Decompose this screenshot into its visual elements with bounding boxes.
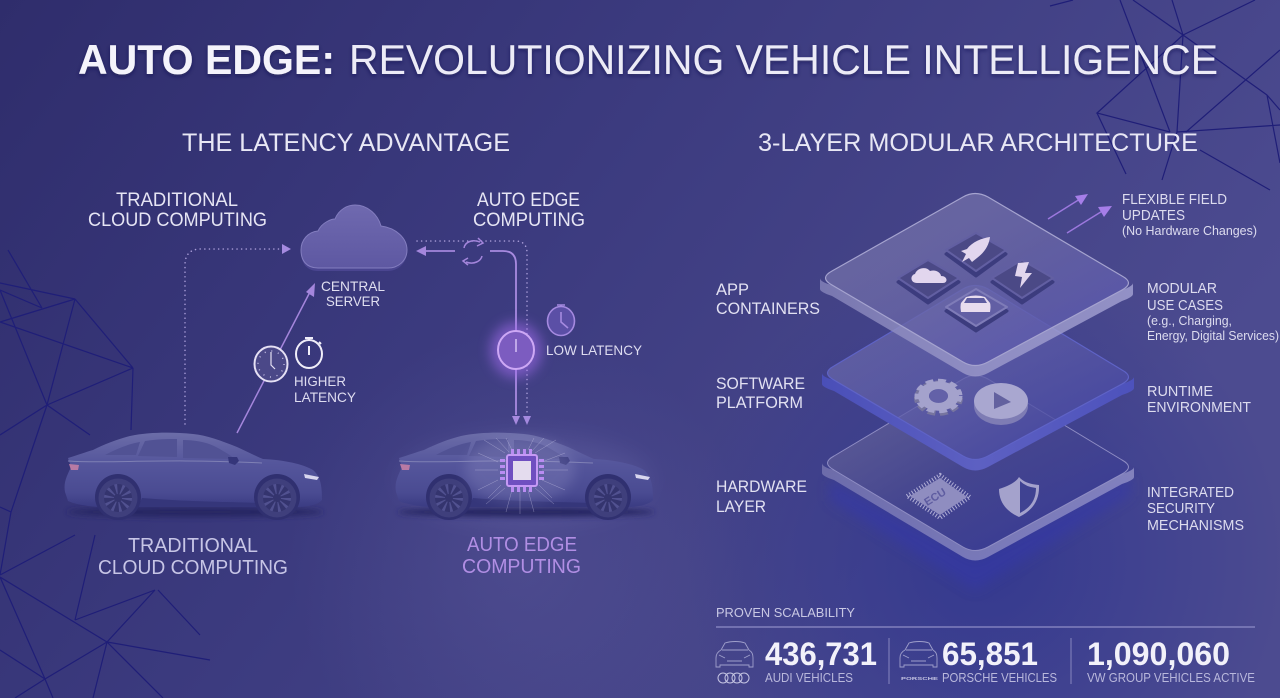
stat: audi xyxy=(716,636,877,685)
icon: low latency clock xyxy=(548,305,574,336)
label: flexible field updates: FLEXIBLE FIELD xyxy=(1122,192,1227,208)
heading: architecture: 3-LAYER MODULAR ARCHITECTURE xyxy=(758,129,1198,157)
label: modular use cases: (e.g., Charging, xyxy=(1147,314,1232,328)
icon: ECU chip: ECU xyxy=(922,486,948,509)
label: central server xyxy=(321,278,385,309)
icon tile: lightning xyxy=(992,260,1053,303)
label: runtime environment: ENVIRONMENT xyxy=(1147,400,1251,416)
label: traditional cloud computing bottom: TRADITIONAL xyxy=(128,535,258,557)
label: modular use cases: USE CASES xyxy=(1147,298,1223,314)
title: AUTO EDGE: xyxy=(78,36,335,83)
arrows: field updates xyxy=(1048,194,1112,233)
stat: porsche xyxy=(900,636,1057,685)
arrow: edge to cloud xyxy=(416,246,455,256)
icon: shield xyxy=(999,477,1039,517)
label: app containers: CONTAINERS xyxy=(716,299,820,318)
car: auto edge xyxy=(396,433,654,525)
label: auto edge computing bottom: COMPUTING xyxy=(462,556,581,578)
label: higher latency: HIGHER xyxy=(294,373,346,389)
icon: ECU chip xyxy=(907,475,970,518)
icon: clock xyxy=(254,346,288,382)
label: flexible field updates: (No Hardware Changes) xyxy=(1122,224,1257,238)
icon: audi rings xyxy=(718,673,749,683)
label: auto edge computing top: AUTO EDGE xyxy=(477,190,580,211)
heading: latency advantage: THE LATENCY ADVANTAGE xyxy=(182,129,510,157)
label: auto edge computing top xyxy=(473,190,585,231)
icon: cloud central server xyxy=(301,205,407,271)
stat: porsche: PORSCHE VEHICLES xyxy=(942,670,1057,685)
icon: audi car xyxy=(716,642,753,667)
label: app containers xyxy=(716,280,820,318)
label: traditional cloud computing top xyxy=(88,190,267,231)
arrow: traditional dotted uplink xyxy=(185,244,291,424)
label: modular use cases: MODULAR xyxy=(1147,281,1217,297)
icon: chip xyxy=(475,438,568,514)
layer: hardware plate xyxy=(822,376,1134,590)
label: modular use cases: Energy, Digital Services) xyxy=(1147,329,1279,343)
label: integrated security mechanisms: SECURITY xyxy=(1147,501,1215,517)
stat: audi: AUDI VEHICLES xyxy=(765,670,853,685)
label: traditional cloud computing top: TRADITIONAL xyxy=(116,190,238,211)
label: hardware layer: HARDWARE xyxy=(716,477,807,496)
label: auto edge computing top: COMPUTING xyxy=(473,210,585,231)
icon tile: cloud xyxy=(898,260,959,303)
arrow: edge solid path xyxy=(490,251,520,425)
label: app containers: APP xyxy=(716,280,749,299)
label: auto edge computing bottom xyxy=(462,534,581,578)
stat: audi: 436,731 xyxy=(765,636,877,672)
label: central server: SERVER xyxy=(326,293,380,309)
label: auto edge computing bottom: AUTO EDGE xyxy=(467,534,577,556)
panel: layered architecture xyxy=(716,192,1279,590)
stats heading: PROVEN SCALABILITY xyxy=(716,605,855,620)
arrow: traditional latency solid xyxy=(237,283,315,433)
icon: play button xyxy=(974,383,1028,425)
stat: vw group: VW GROUP VEHICLES ACTIVE xyxy=(1087,670,1255,685)
stat: porsche: 65,851 xyxy=(942,636,1038,672)
label: hardware layer xyxy=(716,477,807,516)
icon: gear xyxy=(918,381,960,413)
stat: vw group: 1,090,060 xyxy=(1087,636,1230,672)
label: higher latency xyxy=(294,373,357,405)
label: low latency: LOW LATENCY xyxy=(546,342,643,358)
label: software platform: SOFTWARE xyxy=(716,374,805,393)
stat: vw group xyxy=(1087,636,1255,685)
layer: software plate xyxy=(822,286,1134,470)
icon: stopwatch xyxy=(296,338,322,368)
label: software platform xyxy=(716,374,805,412)
label: software platform: PLATFORM xyxy=(716,393,803,412)
label: traditional cloud computing bottom xyxy=(98,535,288,579)
label: runtime environment: RUNTIME xyxy=(1147,384,1213,400)
icon: porsche car xyxy=(900,642,937,667)
label: traditional cloud computing bottom: CLOUD COMPUTING xyxy=(98,557,288,579)
label: modular use cases xyxy=(1147,281,1279,343)
title continuation: REVOLUTIONIZING VEHICLE INTELLIGENCE xyxy=(349,36,1218,83)
car: traditional xyxy=(65,433,323,520)
icon: porsche wordmark: PORSCHE xyxy=(901,676,938,681)
label: higher latency: LATENCY xyxy=(294,389,357,405)
label: integrated security mechanisms: MECHANISMS xyxy=(1147,518,1244,534)
label: flexible field updates: UPDATES xyxy=(1122,208,1185,224)
icon: sync arrows xyxy=(463,238,483,265)
label: runtime environment xyxy=(1147,384,1251,416)
label: integrated security mechanisms: INTEGRATED xyxy=(1147,485,1234,501)
label: flexible field updates xyxy=(1122,192,1257,238)
label: hardware layer: LAYER xyxy=(716,497,766,516)
icon: glowing clock xyxy=(490,322,542,378)
icon tile: rocket xyxy=(946,233,1006,276)
panel: latency diagram xyxy=(65,190,654,579)
layer: app containers plate xyxy=(820,194,1133,376)
label: traditional cloud computing top: CLOUD COMPUTING xyxy=(88,210,267,231)
arrow: edge dotted path xyxy=(417,241,531,425)
label: integrated security mechanisms xyxy=(1147,485,1244,534)
icon tile: car xyxy=(946,289,1007,331)
panel: proven scalability xyxy=(716,605,1255,685)
label: central server: CENTRAL xyxy=(321,278,385,294)
